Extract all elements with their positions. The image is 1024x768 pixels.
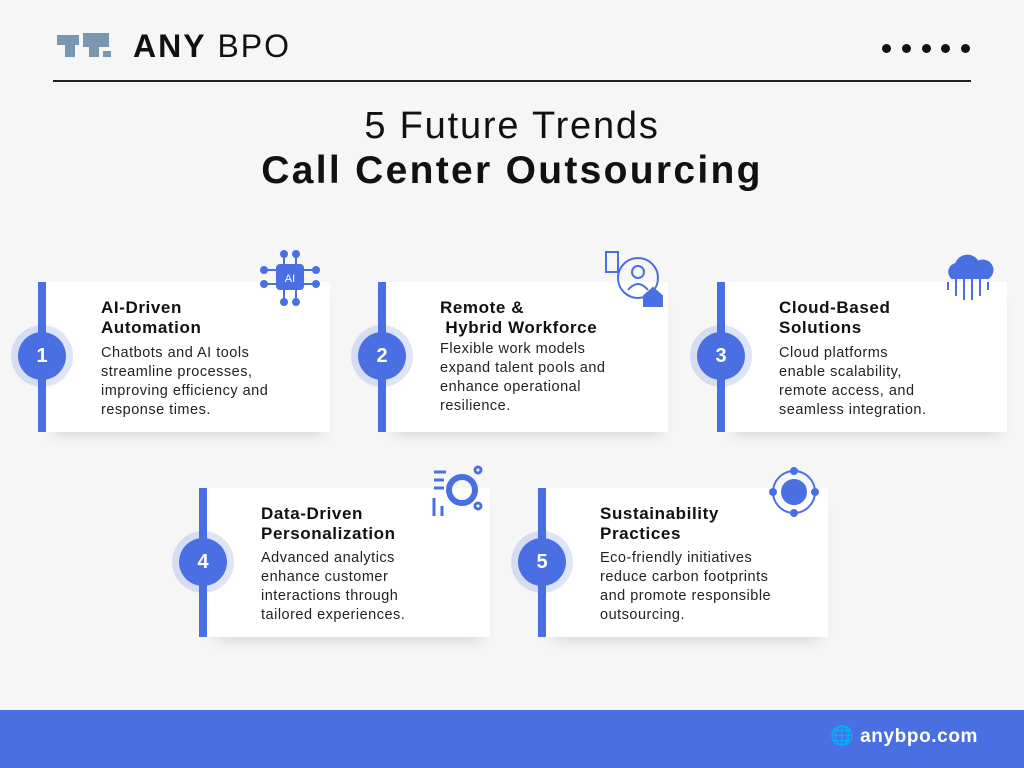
card 5: Practices — [600, 524, 681, 543]
brand name: ANY BPO — [133, 28, 291, 64]
header logo — [57, 28, 291, 64]
icon: AI chip: AI — [285, 273, 295, 285]
card 5: Sustainability — [600, 504, 719, 523]
card 2: resilience. — [440, 398, 511, 414]
card 4: tailored experiences. — [261, 607, 405, 623]
card 2: Remote & — [440, 298, 524, 317]
title: Call Center Outsourcing — [261, 149, 763, 192]
card 4: Advanced analytics — [261, 550, 395, 566]
card 5 — [546, 488, 828, 637]
card 1: AI-Driven — [101, 298, 182, 317]
card 4: Data-Driven — [261, 504, 363, 523]
text: 5 — [536, 550, 548, 572]
text: 3 — [715, 344, 727, 366]
card 5: and promote responsible — [600, 588, 771, 604]
card 4: Personalization — [261, 524, 396, 543]
card 2 — [386, 282, 668, 432]
card 1: streamline processes, — [101, 364, 253, 380]
icon: globe leaf — [769, 467, 819, 517]
card 4: enhance customer — [261, 569, 388, 585]
card 4 — [207, 488, 490, 637]
icon: cloud — [947, 254, 994, 300]
card 1: improving efficiency and — [101, 383, 268, 399]
card 1 — [46, 282, 330, 432]
text: 2 — [376, 344, 388, 366]
card 3: seamless integration. — [779, 402, 927, 418]
icon: data chart — [432, 466, 482, 516]
footer bar — [0, 710, 1024, 768]
icon: world map dots — [57, 33, 111, 57]
card 1: Chatbots and AI tools — [101, 345, 249, 361]
card 3: enable scalability, — [779, 364, 902, 380]
card 4: interactions through — [261, 588, 398, 604]
card 3: Solutions — [779, 318, 862, 337]
card 5: Eco-friendly initiatives — [600, 550, 752, 566]
card 3: Cloud-Based — [779, 298, 890, 317]
menu dots — [882, 44, 970, 53]
title — [261, 105, 763, 192]
icon: remote worker — [605, 251, 663, 307]
card 2: expand talent pools and — [440, 360, 606, 376]
card 1: Automation — [101, 318, 201, 337]
card 3: remote access, and — [779, 383, 915, 399]
card 5: outsourcing. — [600, 607, 685, 623]
footer url: 🌐 anybpo.com — [830, 726, 978, 747]
title: 5 Future Trends — [364, 105, 660, 147]
card 5: reduce carbon footprints — [600, 569, 768, 585]
text: 4 — [197, 550, 209, 572]
card 2: Flexible work models — [440, 341, 585, 357]
icon: AI chip — [260, 250, 320, 306]
card 3: Cloud platforms — [779, 345, 888, 361]
card 2: Hybrid Workforce — [445, 318, 597, 337]
card 2: enhance operational — [440, 379, 581, 395]
card 3 — [725, 282, 1007, 432]
text: 1 — [36, 344, 48, 366]
card 1: response times. — [101, 402, 211, 418]
